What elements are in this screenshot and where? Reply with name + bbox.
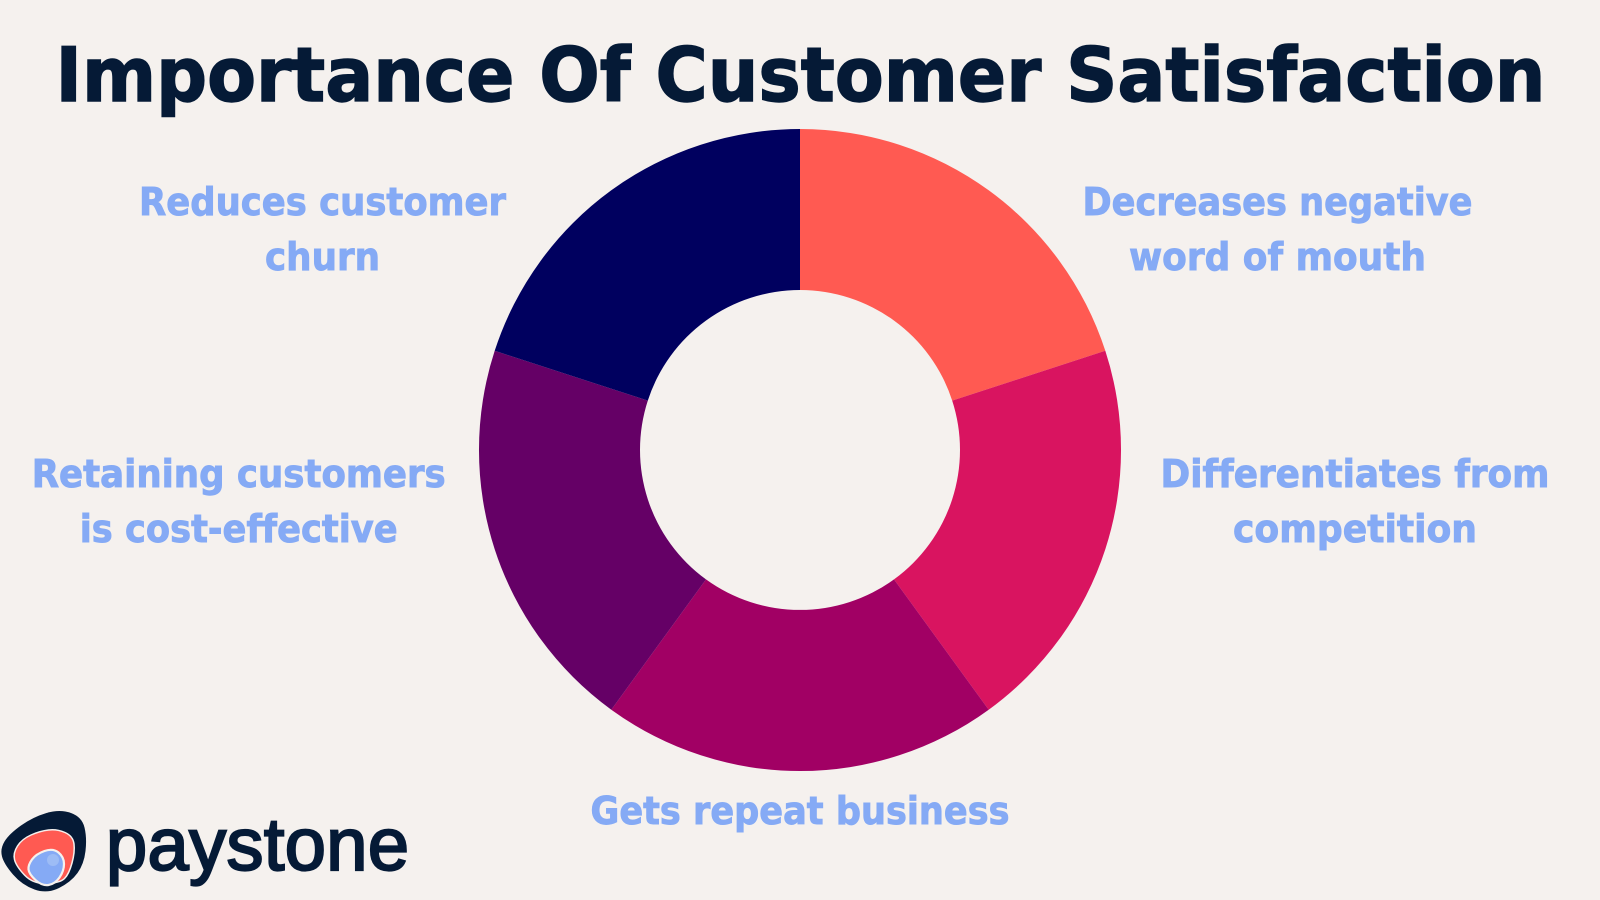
label: decreases negative word of mouth: Decreases negative xyxy=(1082,180,1472,224)
icon: paystone stone mark xyxy=(1,811,86,891)
title: Importance Of Customer Satisfaction xyxy=(56,31,1546,119)
segment: retaining customers xyxy=(479,351,706,710)
label: reduces customer churn: churn xyxy=(265,235,380,279)
segment: decreases negative word of mouth xyxy=(800,129,1105,401)
label: reduces customer churn xyxy=(139,180,506,279)
label: decreases negative word of mouth xyxy=(1082,180,1472,279)
label: retaining customers is cost-effective: Retaining customers xyxy=(32,452,446,496)
wordmark: paystone xyxy=(106,803,409,886)
label: reduces customer churn: Reduces customer xyxy=(139,180,506,224)
logo: paystone xyxy=(1,803,409,891)
label: differentiates from competition: Differentiates from xyxy=(1160,452,1550,496)
label: retaining customers is cost-effective: is cost-effective xyxy=(80,507,398,551)
segment: reduces customer churn xyxy=(495,129,800,401)
donut chart xyxy=(479,129,1121,771)
label: gets repeat business: Gets repeat business xyxy=(590,789,1010,833)
segment: gets repeat business xyxy=(611,579,989,771)
label: retaining customers is cost-effective xyxy=(32,452,446,551)
label: differentiates from competition: competition xyxy=(1233,507,1477,551)
segment: differentiates from competition xyxy=(894,351,1121,710)
label: differentiates from competition xyxy=(1160,452,1550,551)
label: decreases negative word of mouth: word of mouth xyxy=(1129,235,1426,279)
